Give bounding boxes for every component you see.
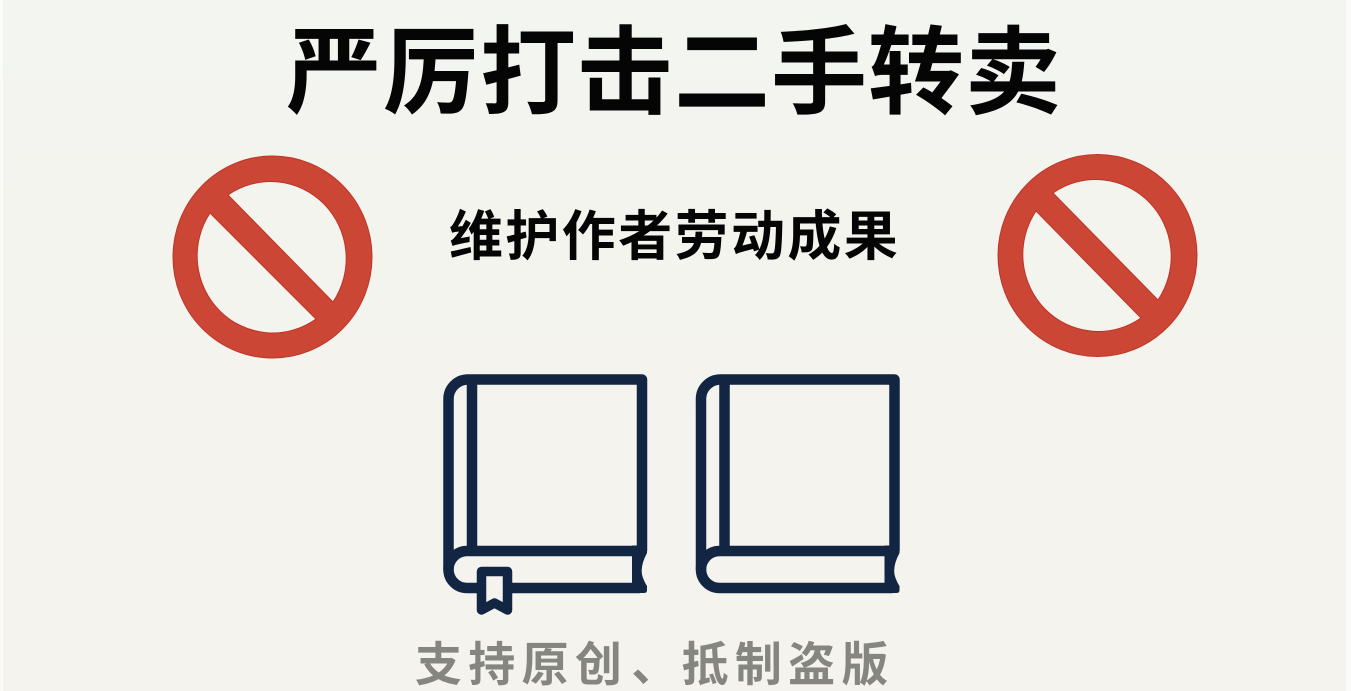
subtitle: 维护作者劳动成果 [449,207,900,267]
icon: left prohibition sign [173,156,372,358]
icon: right prohibition sign [998,154,1197,356]
title: 严厉打击二手转卖 [286,20,1062,127]
icon: book with bookmark [448,380,647,610]
icon: book without bookmark [701,380,900,593]
footer slogan: 支持原创、抵制盗版 [415,638,895,691]
